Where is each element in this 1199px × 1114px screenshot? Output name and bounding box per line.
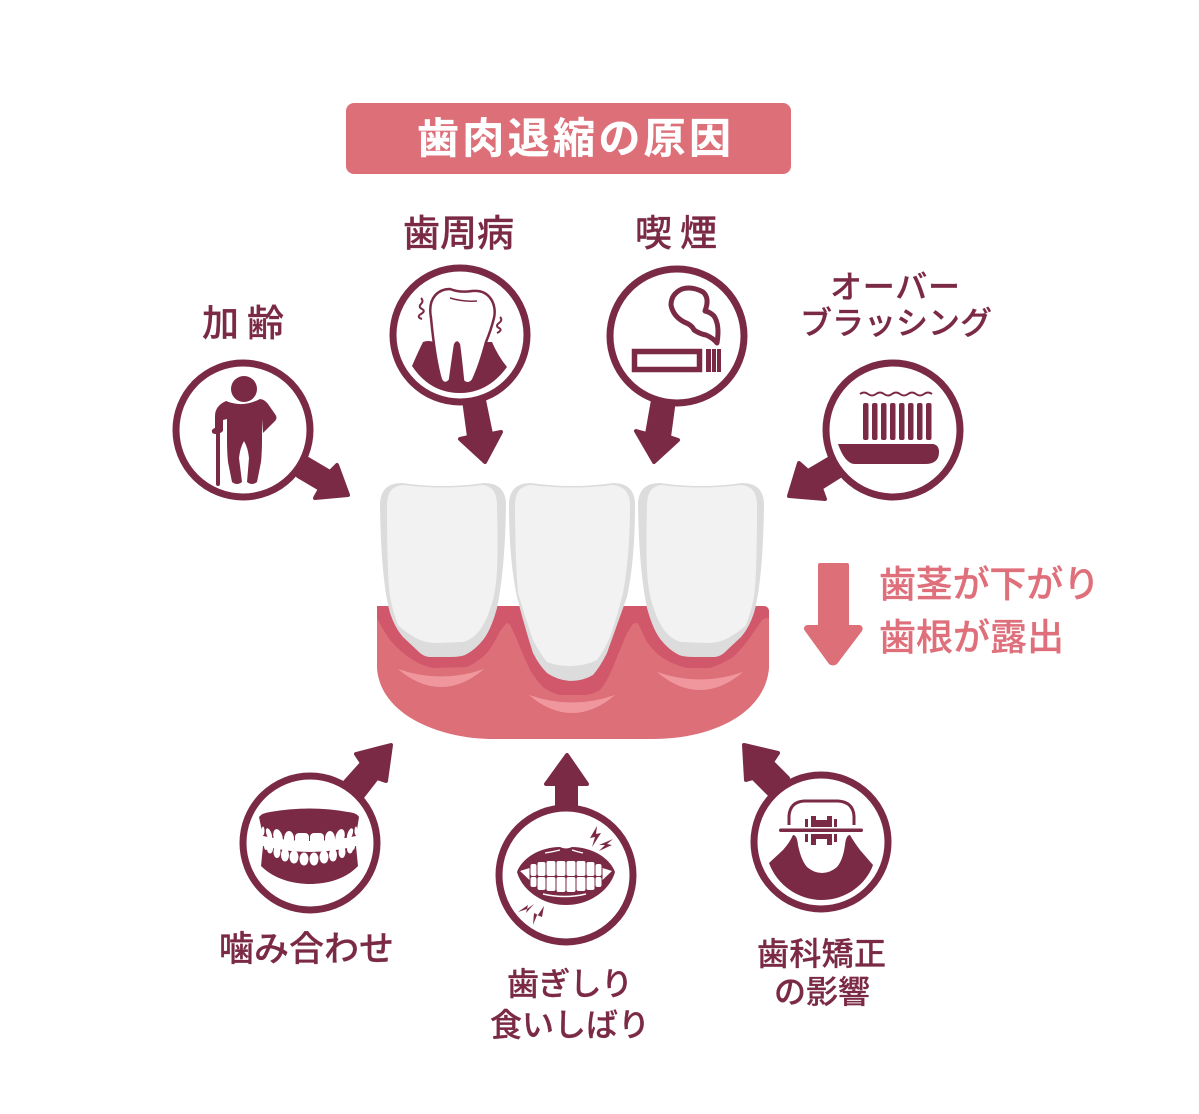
icon: cigarette and smoke: [634, 288, 721, 372]
gum highlights: [398, 669, 484, 687]
arrow: [298, 459, 348, 498]
text: gum recession note: [879, 564, 1100, 658]
cause: aging: [176, 303, 348, 498]
text: gum recession note: 歯根が露出: [879, 617, 1064, 658]
ring: [393, 268, 527, 402]
cause: smoking: [610, 213, 744, 462]
icon: braces: [769, 801, 873, 900]
label: 歯科矯正: [757, 936, 886, 972]
label: 噛み合わせ: [219, 930, 394, 969]
left tooth: [380, 483, 506, 657]
arrow: [546, 755, 587, 808]
arrow: [789, 458, 840, 499]
cause: orthodontics: の影響: [774, 974, 870, 1010]
title banner: [346, 103, 791, 174]
gum dark margin: [377, 606, 769, 695]
text: gum recession note: 歯茎が下がり: [879, 564, 1100, 605]
label: 加齢: [202, 303, 284, 344]
arrow: [744, 745, 788, 795]
label: オーバー: [830, 269, 960, 305]
icon: clenched teeth: [517, 826, 615, 925]
ring: [243, 776, 377, 910]
cause: bite: [219, 745, 394, 969]
cause: overbrushing: [789, 269, 992, 499]
middle tooth: [509, 483, 635, 681]
icon: elderly person with cane: [212, 376, 276, 486]
icon: dentures: [259, 808, 359, 884]
icon: toothbrush: [838, 392, 939, 464]
arrow: [345, 745, 391, 796]
cause: grinding and clenching: [490, 755, 650, 1043]
ring: [176, 363, 310, 497]
label: 歯ぎしり: [507, 966, 633, 1002]
cause: overbrushing: ブラッシング: [800, 305, 992, 341]
ring: [826, 363, 960, 497]
label: 喫煙: [635, 213, 717, 254]
cause: grinding and clenching: 食いしばり: [490, 1007, 650, 1043]
arrow: [460, 400, 501, 462]
icon: tooth with receding gum: [412, 289, 507, 393]
arrow: [636, 400, 678, 462]
gum: [377, 606, 769, 739]
ring: [610, 269, 744, 403]
label: 歯周病: [403, 213, 514, 254]
cause: periodontal disease: [393, 213, 527, 462]
title banner: 歯肉退縮の原因: [417, 115, 731, 162]
right tooth: [638, 483, 764, 657]
central illustration: teeth and gum: [377, 483, 769, 739]
ring: [499, 808, 633, 942]
ring: [754, 775, 888, 909]
cause: orthodontics: [744, 745, 888, 1010]
arrow: gum recedes: [804, 563, 863, 666]
